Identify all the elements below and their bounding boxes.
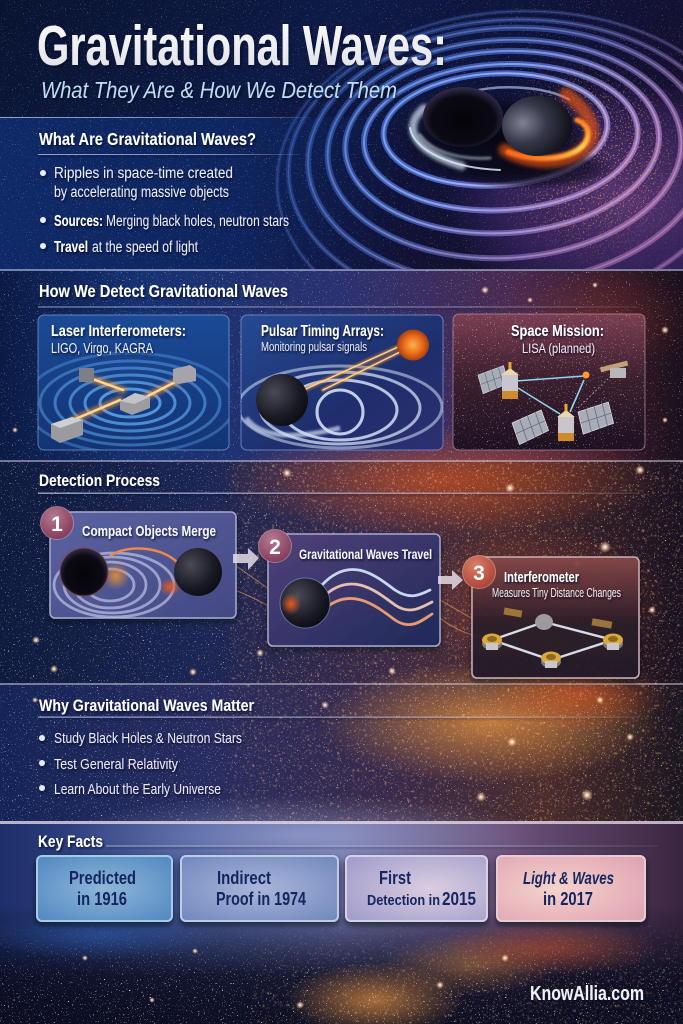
card text: Space Mission: (511, 323, 604, 340)
sparks (488, 53, 683, 266)
panel: laser interferometers (25, 315, 235, 453)
badge 3 (462, 556, 496, 588)
satellite A (478, 362, 519, 399)
inner dark basin (400, 94, 600, 186)
bullet: ripples: Ripples in space-time created (54, 165, 233, 182)
fact: indirect proof 1974: Indirect (217, 868, 271, 888)
fact: first detection 2015: Detection in (367, 892, 440, 909)
bullets: Test General Relativity (54, 756, 178, 773)
hero illustration: merging black holes with ripples (275, 9, 683, 269)
white swirl (410, 108, 500, 170)
heading: Key Facts (38, 832, 103, 851)
faint wave trails between steps (235, 565, 490, 640)
concentric ripple rings (275, 9, 683, 269)
panel: pulsar timing arrays (238, 315, 443, 450)
fact: indirect proof 1974 (181, 856, 338, 921)
bullets: Study Black Holes & Neutron Stars (54, 730, 242, 747)
card text (51, 323, 186, 357)
compact star (280, 578, 330, 628)
bullet: sources: Sources: (54, 213, 103, 230)
card text: LISA (planned) (522, 340, 595, 356)
step 1: compact objects merge (40, 506, 236, 618)
bullets: Learn About the Early Universe (54, 781, 221, 798)
fact: indirect proof 1974: Proof in 1974 (216, 889, 306, 909)
detector boxes (51, 365, 196, 443)
dark compact object (256, 374, 308, 426)
pulsar signal beams (297, 347, 400, 393)
black hole 1 (60, 548, 108, 596)
badge 3: 3 (473, 562, 485, 585)
arrow: step 1 to 2 (233, 548, 259, 570)
satellite B (511, 401, 614, 445)
fact: predicted 1916 (37, 856, 172, 921)
fact: first detection 2015: 2015 (442, 889, 476, 909)
card text (511, 323, 604, 356)
interferometer ripples (38, 352, 229, 450)
panel: space mission (453, 314, 645, 450)
heading: Why Gravitational Waves Matter (39, 696, 254, 715)
badge 1: 1 (51, 513, 63, 536)
title: Gravitational Waves: (37, 14, 447, 78)
subtitle: What They Are & How We Detect Them (41, 77, 397, 103)
fire crescent (505, 94, 592, 161)
satellite C (582, 361, 628, 378)
card text: Pulsar Timing Arrays: (261, 323, 384, 340)
bullet: travel (40, 239, 199, 256)
card text: LIGO, Virgo, KAGRA (51, 340, 153, 357)
merger glow (102, 562, 130, 590)
fact: light and waves 2017: in 2017 (543, 889, 593, 909)
laser links (516, 375, 612, 414)
shadow under stars (460, 152, 612, 190)
step 3: interferometer (462, 556, 639, 678)
fact: light and waves 2017: Light & Waves (523, 868, 614, 888)
neutron star (502, 96, 572, 156)
panel: key facts (37, 832, 658, 921)
merge ripples (54, 553, 174, 617)
bullet: ripples (40, 165, 233, 201)
badge 2 (258, 530, 292, 562)
step title: Compact Objects Merge (82, 523, 216, 540)
heading: What Are Gravitational Waves? (39, 129, 256, 149)
bullet: ripples: by accelerating massive objects (54, 184, 229, 201)
travelling waves (322, 569, 432, 625)
laser beams (73, 377, 185, 420)
black hole (423, 87, 503, 147)
heading: detection process: Detection Process (39, 471, 160, 490)
interferometer network (482, 607, 623, 668)
card text (261, 323, 384, 354)
bullet: sources: Merging black holes, neutron stars (106, 213, 289, 230)
fact: light and waves 2017 (497, 856, 645, 921)
bullet: travel: at the speed of light (92, 239, 199, 256)
step 2: gravitational waves travel (258, 530, 440, 646)
fact: first detection 2015 (346, 856, 487, 921)
card text: Monitoring pulsar signals (261, 339, 367, 354)
site credit: KnowAllia.com (530, 983, 644, 1005)
panel: what are gravitational waves (38, 129, 300, 256)
fact: predicted 1916: in 1916 (77, 889, 127, 909)
bullet: sources (40, 213, 289, 230)
badge 1 (40, 506, 74, 540)
bullets (39, 730, 242, 798)
pulsar spiral waves (238, 366, 442, 448)
bullet: travel: Travel (54, 239, 88, 256)
step title: Gravitational Waves Travel (299, 546, 432, 562)
ripple glow (458, 88, 683, 269)
step title: Interferometer (504, 569, 579, 586)
panel: why gravitational waves matter (38, 696, 640, 798)
fact: first detection 2015: First (379, 868, 411, 888)
heading: how we detect: How We Detect Gravitational Waves (39, 281, 288, 301)
card text: Laser Interferometers: (51, 323, 186, 340)
black hole 2 (174, 548, 222, 596)
inner ring highlight (470, 87, 570, 100)
badge 2: 2 (269, 536, 281, 559)
step subtitle: Measures Tiny Distance Changes (492, 586, 621, 600)
arrow: step 2 to 3 (438, 570, 463, 590)
section bands: dividing lines (0, 117, 683, 824)
pulsar star (397, 330, 429, 360)
orange arc (110, 548, 178, 563)
fact: predicted 1916: Predicted (69, 868, 136, 888)
